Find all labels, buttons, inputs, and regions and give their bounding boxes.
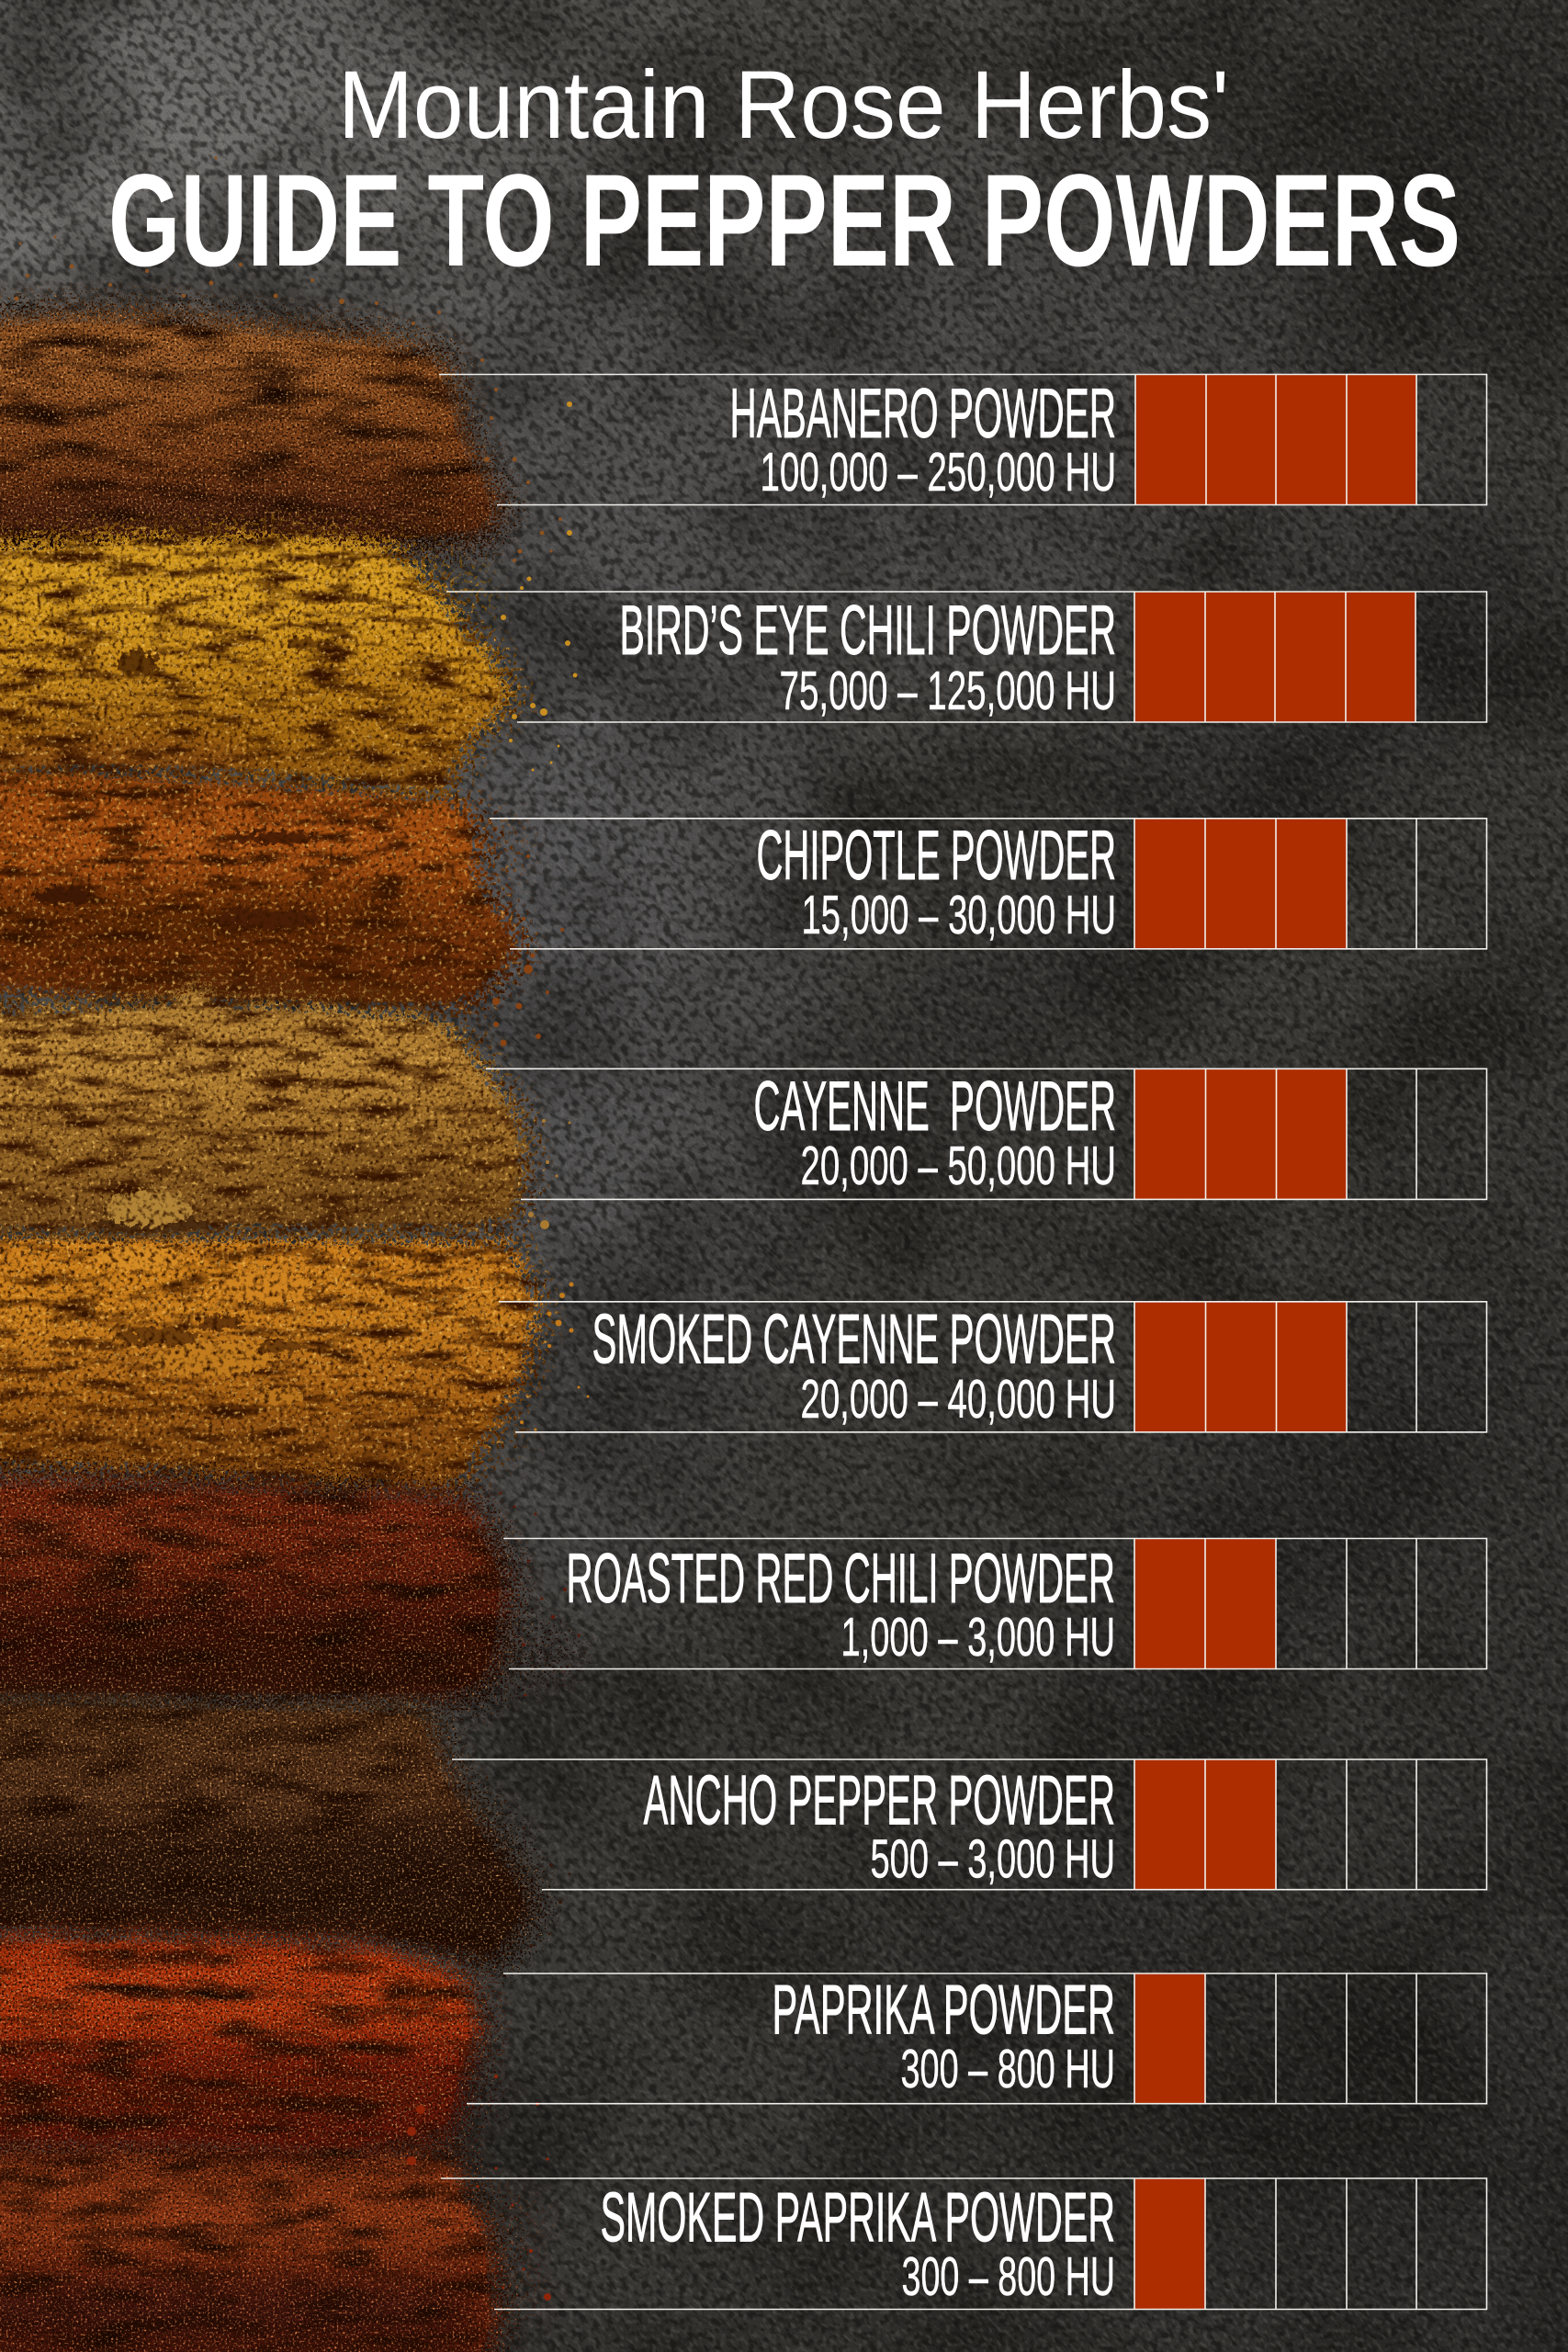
pile: roasted red chili powder bbox=[0, 1470, 579, 1709]
heat meter: 3 of 5 bbox=[499, 1302, 1486, 1432]
pile: habanero powder bbox=[0, 308, 511, 560]
row: Chipotle powder bbox=[490, 817, 1486, 949]
label: Paprika heat range: 300 – 800 HU bbox=[900, 2039, 1115, 2099]
row: Ancho pepper powder bbox=[452, 1759, 1486, 1890]
label: Habanero name: HABANERO POWDER bbox=[729, 375, 1116, 453]
label: Bird's eye heat range: 75,000 – 125,000 HU bbox=[779, 661, 1116, 721]
pile: smoked cayenne powder bbox=[0, 1227, 542, 1496]
row: Cayenne powder bbox=[486, 1068, 1486, 1199]
heat meter: 2 of 5 bbox=[452, 1759, 1486, 1890]
pile: bird's eye chili powder bbox=[0, 531, 522, 805]
pile: ancho pepper powder bbox=[0, 1689, 546, 1972]
pile: chipotle powder bbox=[0, 753, 525, 1015]
label: Ancho name: ANCHO PEPPER POWDER bbox=[643, 1762, 1115, 1839]
powder piles stacked along the left edge bbox=[0, 156, 590, 2352]
heat meter: 1 of 5 bbox=[467, 1973, 1486, 2104]
row: Bird's eye chili powder bbox=[446, 592, 1486, 722]
heat meter: 4 of 5 bbox=[446, 592, 1486, 722]
label: Paprika name: PAPRIKA POWDER bbox=[772, 1972, 1115, 2049]
row: Roasted red chili powder bbox=[503, 1538, 1486, 1668]
label: Habanero heat range: 100,000 – 250,000 HU bbox=[761, 442, 1116, 503]
heat meter: 1 of 5 bbox=[441, 2178, 1486, 2310]
label: Smoked paprika name: SMOKED PAPRIKA POWDER bbox=[601, 2179, 1115, 2256]
pile: smoked paprika powder bbox=[0, 2136, 533, 2352]
label: Cayenne heat range: 20,000 – 50,000 HU bbox=[801, 1136, 1116, 1196]
heat meter: 3 of 5 bbox=[486, 1069, 1486, 1199]
row: Smoked cayenne powder bbox=[499, 1301, 1486, 1432]
row: Smoked paprika powder bbox=[441, 2178, 1486, 2310]
row: Habanero powder bbox=[439, 375, 1486, 505]
pile: cayenne powder bbox=[0, 972, 531, 1242]
powder clumps and crevices bbox=[33, 638, 321, 1406]
label: Chipotle name: CHIPOTLE POWDER bbox=[757, 817, 1116, 895]
row: Paprika powder bbox=[467, 1972, 1486, 2104]
label: Cayenne name: CAYENNE POWDER bbox=[753, 1068, 1116, 1146]
label: Roasted red chili heat range: 1,000 – 3,000 HU bbox=[841, 1607, 1115, 1668]
label: Smoked paprika heat range: 300 – 800 HU bbox=[902, 2246, 1115, 2307]
heat meter: 4 of 5 bbox=[439, 375, 1486, 505]
label: Chipotle heat range: 15,000 – 30,000 HU bbox=[801, 885, 1116, 945]
title bbox=[108, 51, 1461, 294]
heat meter: 3 of 5 bbox=[490, 819, 1486, 949]
label: Smoked cayenne name: SMOKED CAYENNE POWDER bbox=[592, 1301, 1116, 1378]
pile: paprika powder bbox=[0, 1928, 496, 2164]
heat meter: 2 of 5 bbox=[503, 1538, 1486, 1668]
label: Ancho heat range: 500 – 3,000 HU bbox=[871, 1828, 1115, 1889]
scattered powder grains bbox=[15, 156, 590, 2301]
label: Smoked cayenne heat range: 20,000 – 40,000 HU bbox=[801, 1369, 1116, 1430]
label: Bird's eye name: BIRD’S EYE CHILI POWDER bbox=[619, 592, 1116, 670]
title line: brand: Mountain Rose Herbs' bbox=[338, 51, 1229, 159]
